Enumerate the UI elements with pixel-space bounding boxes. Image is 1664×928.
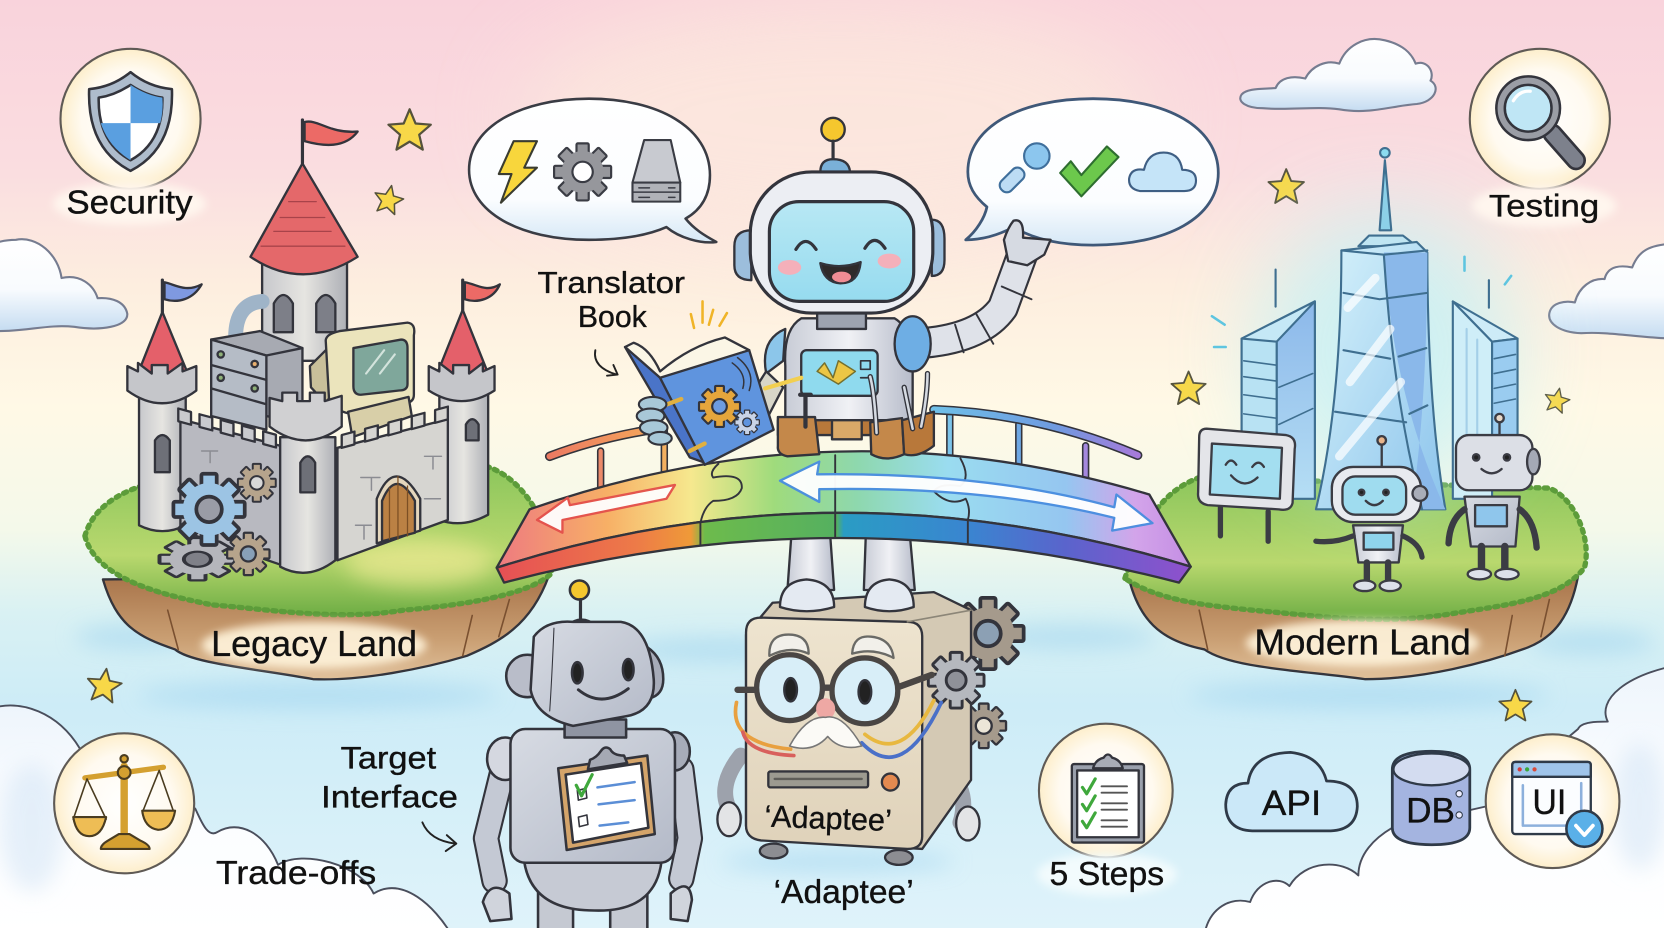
icon: green check (1060, 146, 1119, 196)
friendly monitor character (1198, 429, 1295, 541)
arms (486, 769, 690, 881)
label glow: Legacy Land (202, 622, 427, 669)
stars (85, 109, 1572, 720)
icon badge: Trade-offs scales (54, 733, 194, 873)
label: DB: DB (1406, 791, 1455, 830)
island grass (85, 467, 552, 615)
chest screen (801, 350, 878, 396)
label: Adaptee on machine: ‘Adaptee’ (764, 799, 892, 838)
castle door (377, 476, 420, 543)
cloud shading (0, 743, 1664, 891)
island rock (103, 576, 549, 679)
central skyscraper (1316, 148, 1445, 509)
pipe (236, 301, 262, 337)
label: Translator Book: Book (578, 299, 647, 334)
front gear on temple (928, 652, 984, 708)
machine feet (760, 844, 787, 858)
server stack (211, 331, 302, 430)
right shoulder (895, 316, 931, 371)
pages (625, 337, 749, 380)
left shoulder and back arm (765, 329, 785, 374)
hand gripping book (637, 397, 672, 445)
clipboard (558, 747, 655, 850)
icon: lightning bolt (499, 141, 537, 203)
balance scales (73, 755, 175, 849)
torso (785, 318, 913, 424)
label: API: API (1262, 784, 1321, 823)
cloud: right (1549, 243, 1664, 339)
double arrow: to and from modern land (780, 462, 1152, 531)
bridge front face (497, 513, 1191, 583)
coloured wires (735, 702, 791, 749)
cloud: top right (1240, 39, 1436, 111)
head (506, 580, 663, 726)
label: Trade-offs: Trade-offs (216, 854, 376, 891)
cloud: bottom left (0, 706, 451, 928)
round glasses (738, 655, 932, 724)
label: UI: UI (1532, 783, 1566, 822)
icon: gear (554, 143, 611, 200)
icon badge: Testing magnifier (1470, 49, 1610, 189)
label: Target Interface: Target (341, 739, 436, 775)
small grey robot (1449, 414, 1540, 579)
rainbow puzzle bridge (497, 451, 1191, 583)
panel: Legacy Land island (85, 120, 552, 679)
smiling face (796, 240, 885, 249)
puzzle seams (700, 455, 969, 545)
right tower (429, 280, 500, 523)
brick marks (202, 451, 441, 539)
right tower (1453, 280, 1518, 499)
label glow: 5 Steps (1037, 853, 1177, 896)
left tower (127, 280, 202, 531)
glass towers (1212, 148, 1518, 509)
icon: API cloud (1226, 752, 1357, 831)
label: Adaptee below machine: ‘Adaptee’ (774, 873, 914, 910)
bridge deck (497, 451, 1191, 568)
cover (660, 350, 774, 465)
back gears (952, 598, 1024, 748)
label: Testing: Testing (1489, 187, 1599, 223)
label: Target Interface (321, 739, 458, 815)
old CRT monitor (310, 323, 414, 437)
water streaks (74, 624, 1656, 872)
panel: Modern Land island (1125, 148, 1586, 679)
raised arm (925, 253, 1032, 352)
bridge railing: left (550, 428, 664, 488)
torso (510, 729, 675, 863)
robot raised hand over bubble (1004, 220, 1051, 265)
left curtain wall (180, 419, 280, 565)
pelvis (523, 849, 662, 911)
icon badge: Security shield (60, 49, 201, 189)
main tower (250, 120, 358, 361)
label: 5 Steps: 5 Steps (1050, 855, 1164, 892)
nose (816, 698, 835, 719)
translator book (625, 301, 774, 465)
icon badge: 5 Steps clipboard (1039, 724, 1173, 857)
cabinet (746, 592, 971, 849)
character: Adaptee legacy machine (717, 592, 1024, 865)
island grass (1125, 478, 1586, 619)
right curtain wall (337, 419, 448, 560)
icon: pill and dot (997, 143, 1050, 195)
shield (89, 72, 172, 171)
arrow: to translator book (595, 350, 618, 376)
bridge railing: right (934, 410, 1138, 493)
label glow: Security (53, 183, 206, 225)
cloud: left (0, 239, 127, 331)
bubble outline (966, 99, 1218, 245)
target interface robot (483, 580, 692, 928)
neck (817, 310, 866, 329)
label: Target Interface: Interface (321, 779, 458, 815)
beam from chest (765, 378, 801, 388)
magnifier (1496, 76, 1576, 160)
sparkle dashes (1212, 257, 1511, 347)
tool belt (778, 374, 934, 458)
bubble outline (469, 99, 716, 242)
label: Legacy Land: Legacy Land (211, 623, 417, 664)
centre turret (270, 393, 342, 573)
icon: cloud (1129, 153, 1196, 191)
main robot legs (780, 531, 915, 611)
speech bubble: modern signals (966, 99, 1218, 245)
city glow (1258, 212, 1512, 488)
spine (625, 347, 705, 463)
island rock (1129, 576, 1578, 679)
cloud: bottom right (1204, 663, 1664, 928)
main translator robot (734, 118, 1032, 458)
legs (538, 860, 647, 928)
checklist clipboard (1072, 754, 1144, 843)
label: Translator Book: Translator (538, 265, 685, 300)
soft light at top center (520, 0, 1157, 233)
head (734, 118, 944, 313)
arrow: to target interface clipboard (422, 822, 456, 851)
moustache (790, 717, 862, 748)
icon: server drive (632, 140, 680, 202)
label: Translator Book (538, 265, 685, 334)
speech bubble: legacy signals (469, 99, 716, 242)
label glow: Testing (1472, 185, 1616, 227)
label: Modern Land: Modern Land (1254, 622, 1471, 663)
bushy eyebrows (769, 635, 894, 658)
cover gears (699, 386, 740, 427)
left tower (1242, 270, 1315, 499)
gears at castle foot (160, 464, 276, 580)
icon: DB cylinder (1392, 751, 1470, 845)
arrow: toward legacy land (537, 485, 675, 533)
mechanical arms (725, 756, 963, 822)
sparkles (691, 301, 727, 328)
small blue-faced robot (1316, 436, 1427, 591)
label glow: Modern Land (1246, 620, 1479, 666)
slot and button (768, 771, 899, 791)
label: Security: Security (66, 183, 193, 220)
icon badge: UI window (1486, 734, 1619, 868)
castle (127, 120, 500, 580)
neck (565, 719, 626, 738)
